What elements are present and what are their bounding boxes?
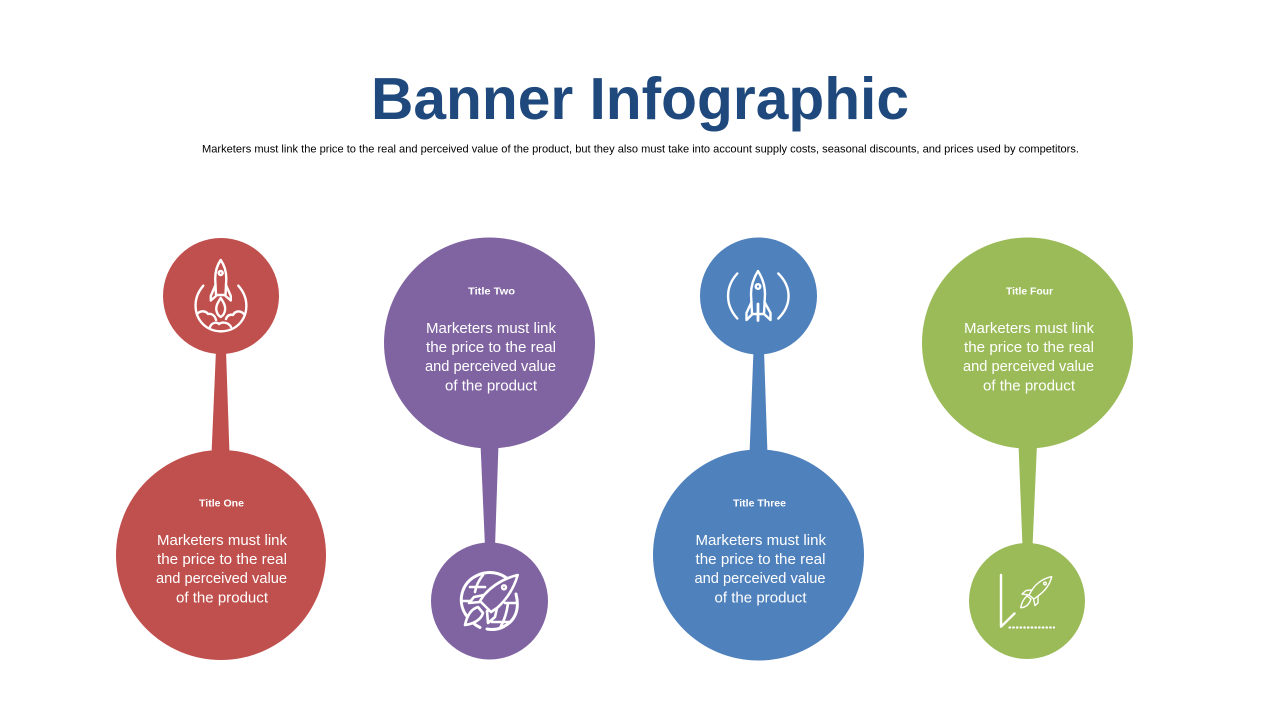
subtitle: Marketers must link the price to the real and perceived value of the product, but they also must take into account supply costs, seasonal discounts, and prices used by competitors. [202, 144, 1079, 156]
text block: title four: Marketers must link [964, 321, 1095, 337]
icon circle: green [969, 543, 1085, 659]
panel: title one [116, 238, 326, 660]
icon: rocket launching over clouds [196, 260, 246, 331]
text block: title four: and perceived value [963, 359, 1094, 375]
text block: title four: of the product [983, 378, 1075, 394]
icon circle: blue [700, 238, 817, 354]
text block: title two: the price to the real [426, 340, 556, 356]
text block: title one: and perceived value [156, 571, 287, 587]
panel: title three [653, 238, 864, 660]
big circle: blue [653, 450, 864, 660]
heading: title three: Title Three [733, 498, 786, 510]
text block: title three: of the product [714, 590, 806, 606]
panel: title four [922, 238, 1133, 659]
text block: title two: Marketers must link [426, 321, 557, 337]
connector stem: red [212, 350, 230, 454]
connector stem: purple [480, 444, 498, 547]
text block: title three: the price to the real [696, 552, 826, 568]
text block: title four [963, 321, 1095, 394]
text block: title one: of the product [176, 590, 268, 606]
heading: title four: Title Four [1006, 286, 1053, 298]
text block: title two: and perceived value [425, 359, 556, 375]
text block: title two [425, 321, 557, 394]
icon: rocket with signal arcs [728, 271, 789, 320]
text block: title three: and perceived value [694, 571, 826, 587]
icon: rocket rising on chart axes [1001, 575, 1054, 628]
text block: title one [156, 533, 288, 606]
big circle: purple [384, 238, 595, 448]
icon circle: red [163, 238, 279, 354]
text block: title three [694, 533, 827, 606]
big circle: green [922, 238, 1133, 448]
big circle: red [116, 450, 326, 660]
text block: title four: the price to the real [964, 340, 1094, 356]
text block: title one: the price to the real [157, 552, 287, 568]
heading: title one: Title One [199, 498, 244, 510]
icon: rocket over globe [461, 572, 518, 629]
heading: title two: Title Two [468, 286, 515, 298]
text block: title one: Marketers must link [157, 533, 288, 549]
text block: title three: Marketers must link [696, 533, 827, 549]
connector stem: blue [750, 350, 768, 454]
icon circle: purple [431, 542, 548, 660]
panel: title two [384, 238, 595, 660]
text block: title two: of the product [445, 378, 537, 394]
title: Banner Infographic [371, 66, 909, 132]
connector stem: green [1018, 444, 1037, 547]
